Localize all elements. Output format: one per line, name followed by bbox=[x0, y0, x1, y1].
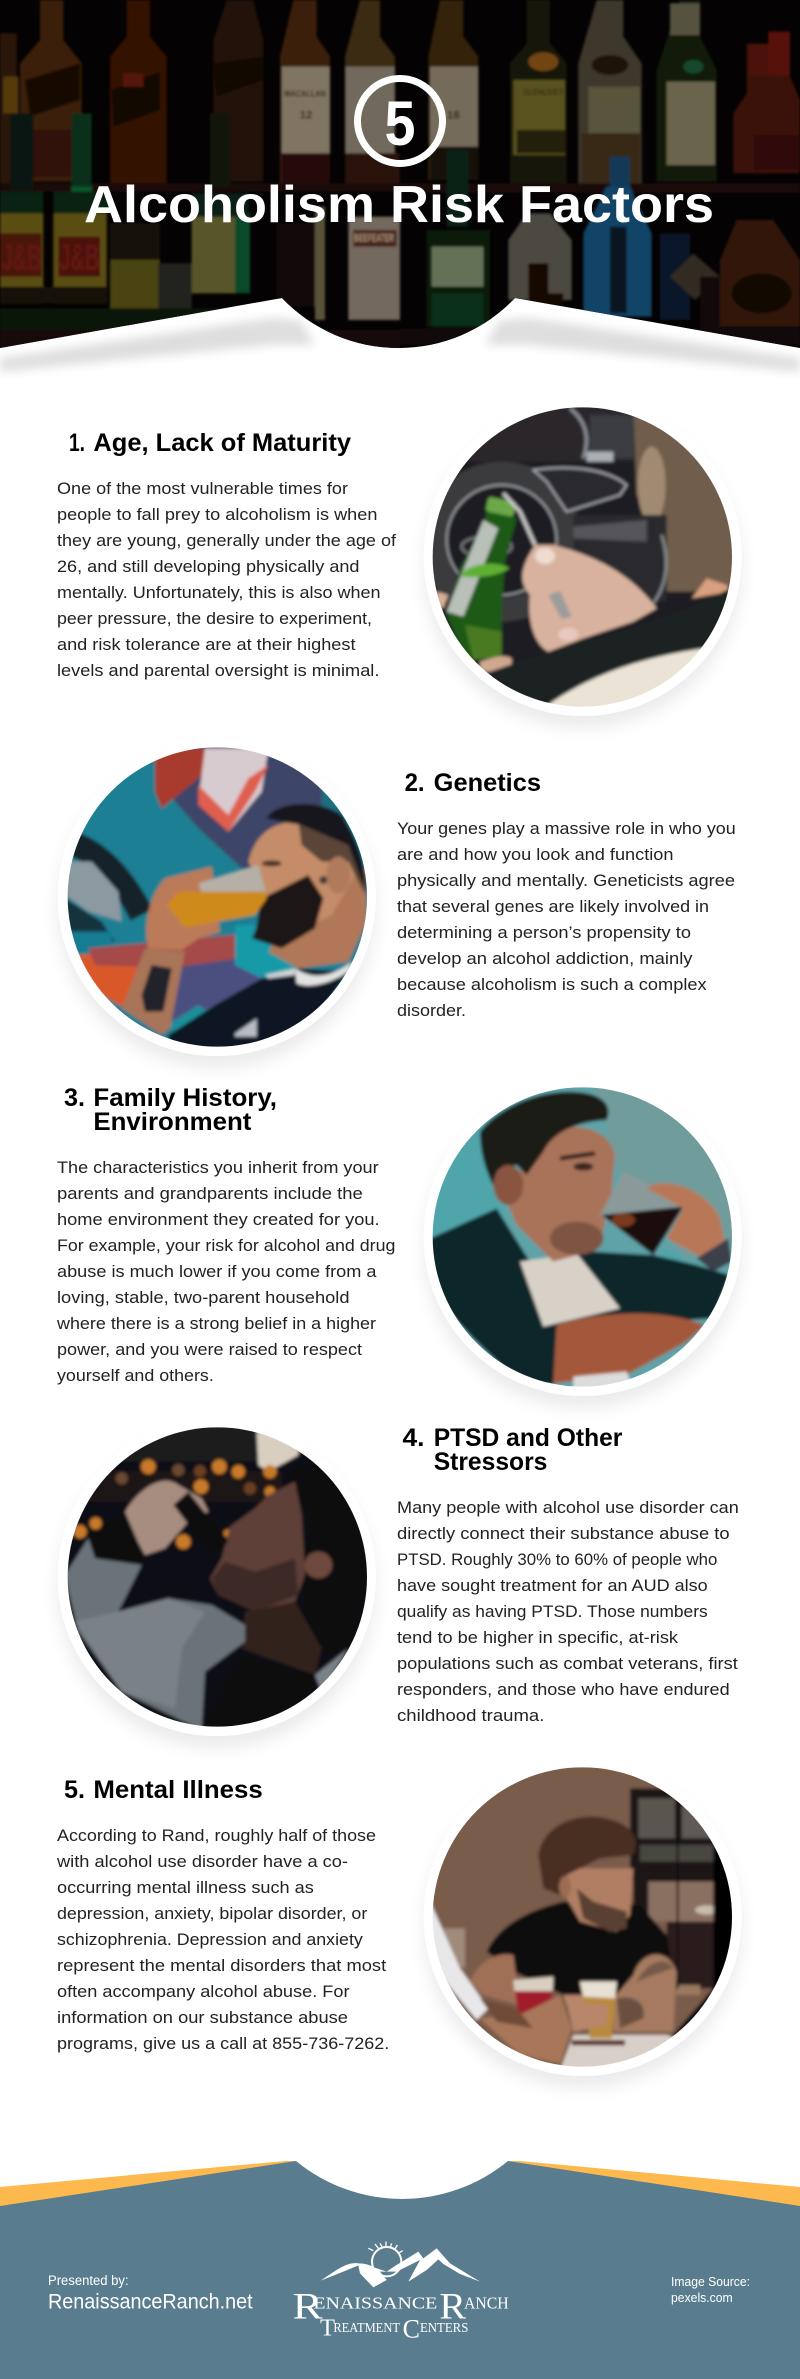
logo wordmark: ENTERS bbox=[420, 2320, 468, 2335]
photo 4: man drinking from a flask at night bbox=[55, 1415, 385, 1745]
paragraph 1: 26, and still developing physically and bbox=[57, 557, 360, 576]
paragraph 4: qualify as having PTSD. Those numbers bbox=[397, 1602, 708, 1621]
paragraph 5: depression, anxiety, bipolar disorder, or bbox=[57, 1904, 368, 1923]
paragraph 3: where there is a strong belief in a higher bbox=[56, 1314, 376, 1333]
number badge: circled 5 bbox=[358, 78, 442, 164]
photo 1: opening a beer bottle at the steering wheel bbox=[420, 395, 750, 725]
paragraph 5: schizophrenia. Depression and anxiety bbox=[57, 1930, 363, 1949]
header paper-curl shadow bbox=[0, 318, 800, 372]
paragraph 1: peer pressure, the desire to experiment, bbox=[57, 609, 372, 628]
header photo: bottles on bar shelves: MACALLAN bbox=[284, 89, 326, 99]
paragraph 5: represent the mental disorders that most bbox=[57, 1956, 386, 1975]
paragraph 4: populations such as combat veterans, first bbox=[397, 1654, 738, 1673]
header photo: bottles on bar shelves: J&B bbox=[2, 237, 42, 278]
paragraph 4: Many people with alcohol use disorder can bbox=[397, 1498, 739, 1517]
heading 4: 4. bbox=[402, 1424, 424, 1452]
paragraph 1 bbox=[57, 479, 396, 680]
paragraph 3: power, and you were raised to respect bbox=[57, 1340, 362, 1359]
paragraph 1: One of the most vulnerable times for bbox=[57, 479, 348, 498]
logo wordmark: T bbox=[320, 2315, 335, 2341]
heading 3: Family History, bbox=[93, 1084, 277, 1112]
heading 2: Genetics bbox=[434, 769, 541, 797]
logo wordmark: R bbox=[293, 2285, 323, 2326]
paragraph 3: yourself and others. bbox=[57, 1366, 214, 1385]
photo 2: man drinking beer before a graffiti wall bbox=[55, 735, 385, 1065]
logo wordmark: ENAISSANCE bbox=[313, 2294, 437, 2313]
paragraph 4: have sought treatment for an AUD also bbox=[397, 1576, 708, 1595]
paragraph 4: PTSD. Roughly 30% to 60% of people who bbox=[397, 1550, 717, 1569]
logo wordmark bbox=[293, 2285, 509, 2343]
paragraph 1: they are young, generally under the age of bbox=[57, 531, 396, 550]
number badge: circled 5: 5 bbox=[384, 89, 416, 159]
paragraph 3: loving, stable, two-parent household bbox=[57, 1288, 350, 1307]
paragraph 2 bbox=[397, 819, 736, 1020]
logo: Renaissance Ranch Treatment Centers bbox=[293, 2242, 509, 2343]
section 1: age, lack of maturity text bbox=[57, 429, 396, 680]
heading 3: 3. bbox=[64, 1084, 85, 1112]
logo wordmark: ANCH bbox=[464, 2294, 509, 2313]
paragraph 1: levels and parental oversight is minimal. bbox=[57, 661, 379, 680]
paragraph 2: develop an alcohol addiction, mainly bbox=[397, 949, 693, 968]
photo 5: man with beer at a cafe table bbox=[420, 1755, 750, 2085]
header photo: bottles on bar shelves: GLENLIVET bbox=[523, 87, 564, 97]
heading 4 bbox=[402, 1424, 623, 1476]
heading 5: 5. bbox=[64, 1776, 85, 1804]
paragraph 4: childhood trauma. bbox=[397, 1706, 544, 1725]
paragraph 3: abuse is much lower if you come from a bbox=[57, 1262, 377, 1281]
section 2: genetics text bbox=[397, 769, 736, 1020]
heading 3: Environment bbox=[93, 1108, 252, 1136]
paragraph 2: that several genes are likely involved in bbox=[397, 897, 709, 916]
paragraph 4: responders, and those who have endured bbox=[397, 1680, 730, 1699]
presented by bbox=[48, 2273, 253, 2314]
paragraph 2: are and how you look and function bbox=[397, 845, 674, 864]
paragraph 2: determining a person’s propensity to bbox=[397, 923, 691, 942]
section 5: mental illness text bbox=[56, 1776, 389, 2053]
paragraph 3: The characteristics you inherit from your bbox=[57, 1158, 379, 1177]
paragraph 5: often accompany alcohol abuse. For bbox=[57, 1982, 350, 2001]
heading 5: Mental Illness bbox=[93, 1776, 263, 1804]
paragraph 3: parents and grandparents include the bbox=[57, 1184, 363, 1203]
paragraph 2: physically and mentally. Geneticists agree bbox=[397, 871, 735, 890]
heading 4: PTSD and Other bbox=[434, 1424, 623, 1452]
paragraph 5: information on our substance abuse bbox=[57, 2008, 348, 2027]
logo wordmark: C bbox=[403, 2313, 420, 2343]
footer band bbox=[0, 2161, 800, 2379]
paragraph 3: home environment they created for you. bbox=[57, 1210, 380, 1229]
paragraph 1: people to fall prey to alcoholism is when bbox=[57, 505, 377, 524]
paragraph 4: directly connect their substance abuse to bbox=[397, 1524, 730, 1543]
header photo: bottles on bar shelves: J&B bbox=[59, 237, 99, 278]
heading 2: 2. bbox=[405, 769, 425, 797]
paragraph 4 bbox=[397, 1498, 739, 1725]
logo wordmark: R bbox=[439, 2285, 467, 2326]
logo wordmark: REATMENT bbox=[333, 2320, 400, 2335]
paragraph 2: because alcoholism is such a complex bbox=[397, 975, 707, 994]
paragraph 2: Your genes play a massive role in who you bbox=[397, 819, 736, 838]
presented by: RenaissanceRanch.net bbox=[48, 2290, 253, 2314]
image source bbox=[671, 2275, 750, 2305]
header photo: bottles on bar shelves bbox=[0, 0, 800, 360]
heading 3 bbox=[64, 1084, 277, 1136]
header photo: bottles on bar shelves: 12 bbox=[300, 109, 312, 121]
icon: sun and mountains bbox=[321, 2242, 480, 2287]
section 3: family history, environment text bbox=[56, 1084, 395, 1385]
paragraph 1: and risk tolerance are at their highest bbox=[57, 635, 356, 654]
paragraph 2: disorder. bbox=[397, 1001, 466, 1020]
paragraph 3 bbox=[56, 1158, 395, 1385]
paragraph 5: with alcohol use disorder have a co- bbox=[56, 1852, 348, 1871]
paragraph 5: occurring mental illness such as bbox=[57, 1878, 314, 1897]
title: Alcoholism Risk Factors bbox=[84, 176, 714, 234]
presented by: Presented by: bbox=[48, 2273, 129, 2288]
paragraph 3: For example, your risk for alcohol and drug bbox=[57, 1236, 395, 1255]
footer yellow accents bbox=[0, 2161, 800, 2210]
paragraph 1: mentally. Unfortunately, this is also when bbox=[57, 583, 380, 602]
image source: pexels.com bbox=[671, 2291, 733, 2305]
heading 1: 1. bbox=[69, 429, 85, 457]
paragraph 5: programs, give us a call at 855-736-7262. bbox=[57, 2034, 389, 2053]
image source: Image Source: bbox=[671, 2275, 750, 2289]
heading 4: Stressors bbox=[434, 1448, 547, 1476]
header photo: bottles on bar shelves: BEEFEATER bbox=[354, 233, 394, 245]
paragraph 5 bbox=[56, 1826, 389, 2053]
photo 3: man in blazer sipping a dark drink bbox=[420, 1075, 750, 1405]
section 4: PTSD and other stressors text bbox=[397, 1424, 739, 1725]
heading 1: Age, Lack of Maturity bbox=[93, 429, 351, 457]
header photo: bottles on bar shelves: 18 bbox=[447, 109, 460, 121]
paragraph 5: According to Rand, roughly half of those bbox=[57, 1826, 376, 1845]
paragraph 4: tend to be higher in specific, at-risk bbox=[397, 1628, 679, 1647]
